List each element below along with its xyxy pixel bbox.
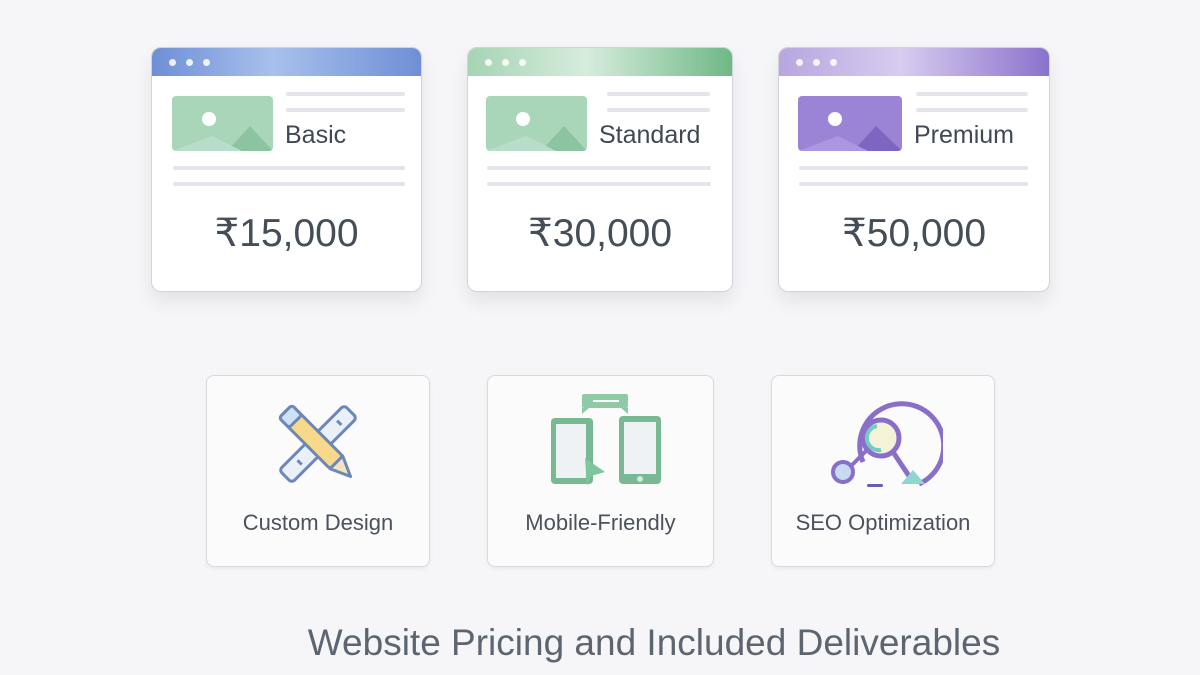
- label: Mobile-Friendly: [525, 510, 676, 535]
- image placeholder: [172, 96, 273, 151]
- card: Premium: [778, 47, 1050, 292]
- feature: SEO Optimization: [771, 375, 995, 567]
- title: Website Pricing and Included Deliverables: [308, 622, 1000, 663]
- label: Standard: [599, 121, 700, 149]
- header bar: [152, 48, 421, 76]
- price: ₹15,000: [214, 212, 359, 255]
- header bar: [468, 48, 732, 76]
- feature: Mobile-Friendly: [487, 375, 714, 567]
- card: Basic: [151, 47, 422, 292]
- feature: Custom Design: [206, 375, 430, 567]
- label: Basic: [285, 121, 346, 149]
- icon: pencil and ruler: [278, 404, 357, 483]
- price: ₹50,000: [842, 212, 986, 255]
- header bar: [779, 48, 1049, 76]
- image placeholder: [798, 96, 902, 151]
- icon: devices: [551, 394, 661, 486]
- price: ₹30,000: [528, 212, 672, 255]
- icon: magnifier: [831, 401, 943, 487]
- label: Premium: [914, 121, 1014, 149]
- card: Standard: [467, 47, 733, 292]
- label: SEO Optimization: [796, 510, 970, 535]
- label: Custom Design: [243, 510, 393, 535]
- image placeholder: [486, 96, 587, 151]
